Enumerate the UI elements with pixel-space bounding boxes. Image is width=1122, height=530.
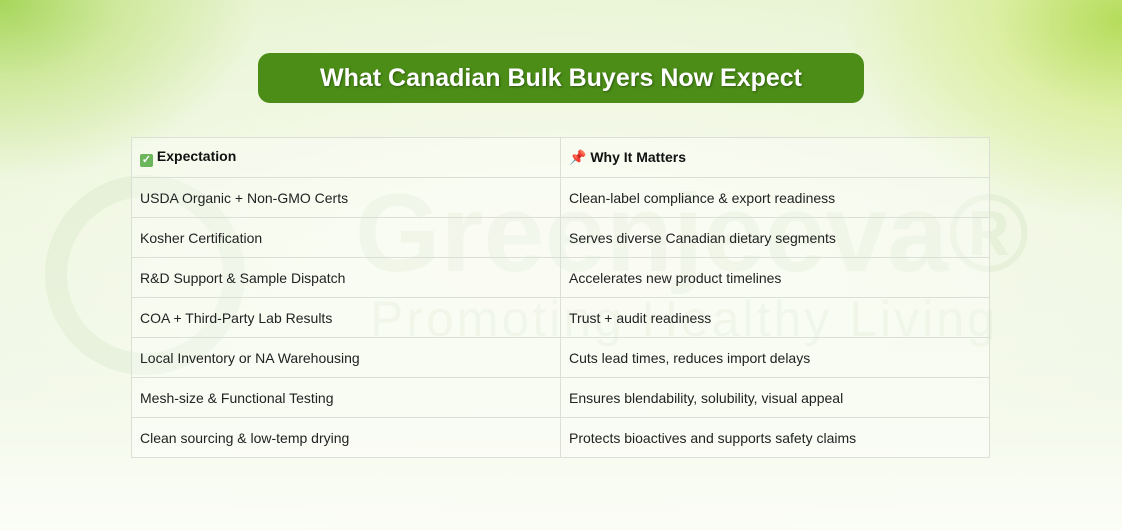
table: Expectation — [157, 148, 236, 164]
title: What Canadian Bulk Buyers Now Expect — [320, 64, 802, 92]
title — [258, 53, 864, 103]
table: Serves diverse Canadian dietary segments — [569, 230, 836, 246]
table: Ensures blendability, solubility, visual appeal — [569, 390, 843, 406]
table: Accelerates new product timelines — [569, 270, 781, 286]
watermark tagline: Promoting Healthy Living — [370, 291, 998, 347]
table: Local Inventory or NA Warehousing — [140, 350, 360, 366]
table: USDA Organic + Non-GMO Certs — [140, 190, 348, 206]
table: COA + Third-Party Lab Results — [140, 310, 332, 326]
table: 📌 Why It Matters — [569, 149, 686, 165]
table — [131, 137, 990, 458]
table: Clean sourcing & low-temp drying — [140, 430, 349, 446]
table: Cuts lead times, reduces import delays — [569, 350, 810, 366]
table: Clean-label compliance & export readiness — [569, 190, 835, 206]
table: Kosher Certification — [140, 230, 262, 246]
table: Protects bioactives and supports safety claims — [569, 430, 856, 446]
table: Mesh-size & Functional Testing — [140, 390, 334, 406]
table: R&D Support & Sample Dispatch — [140, 270, 345, 286]
watermark logo — [45, 175, 245, 375]
table: ✓ — [142, 154, 151, 166]
watermark: Greenjeeva® — [355, 172, 1029, 295]
table: Trust + audit readiness — [569, 310, 711, 326]
